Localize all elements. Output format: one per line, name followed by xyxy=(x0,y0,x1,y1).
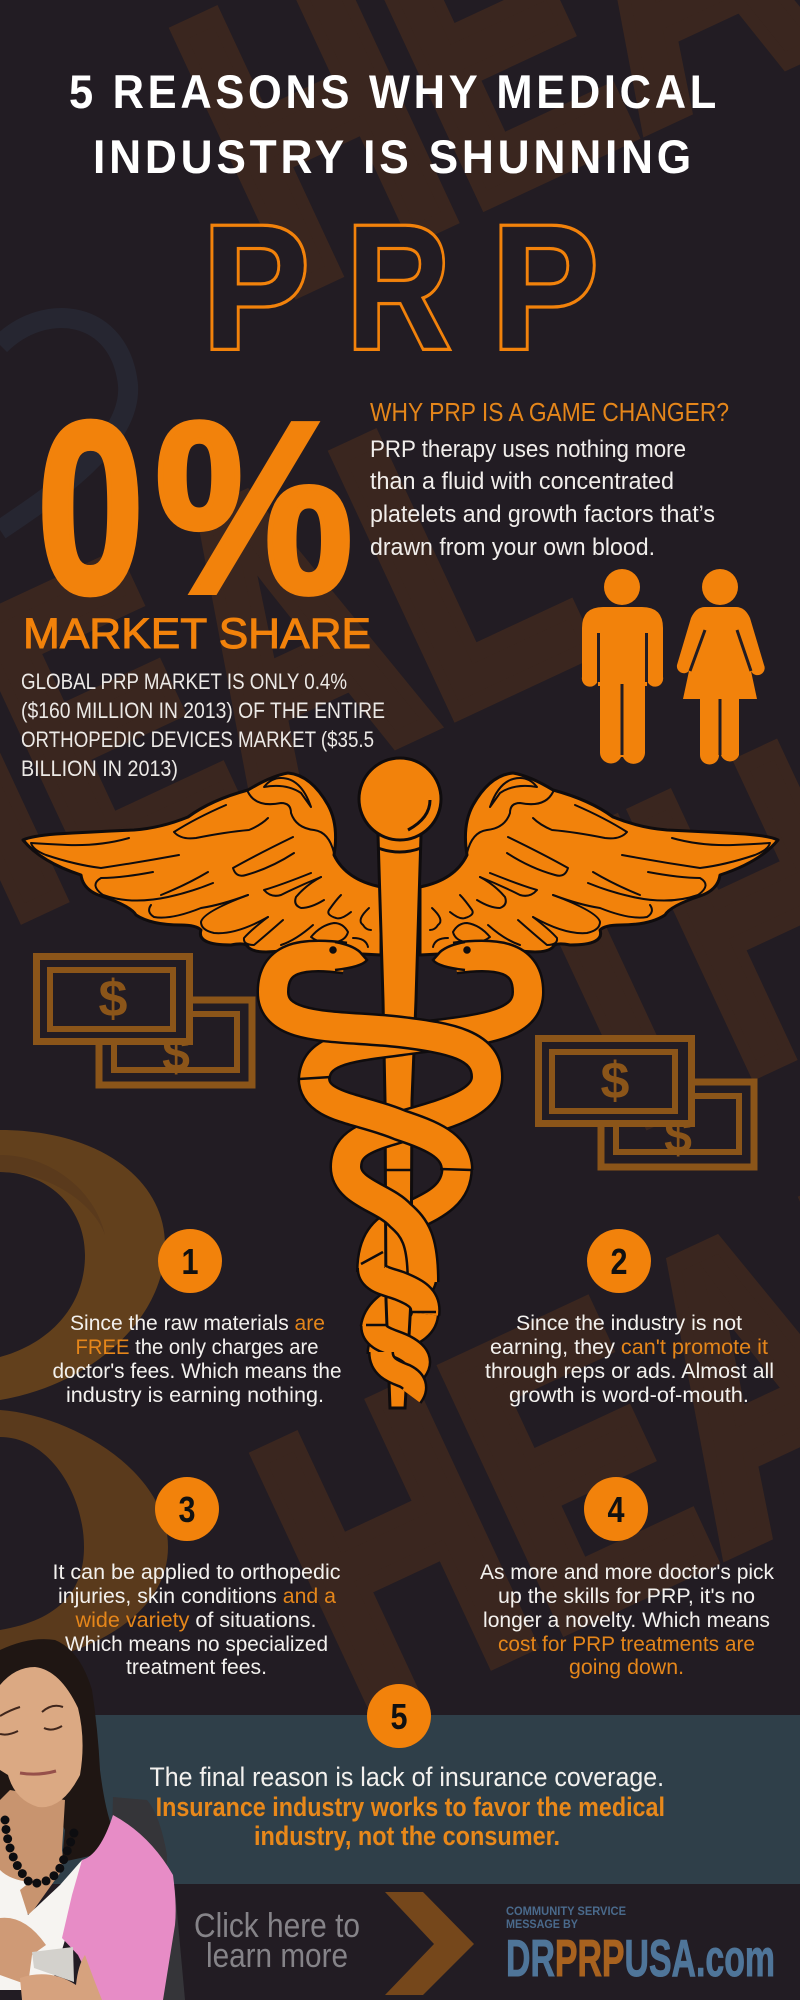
number badge 5: 5 xyxy=(390,1696,408,1737)
title: INDUSTRY IS SHUNNING xyxy=(93,130,695,183)
reason 2 text: growth is word-of-mouth. xyxy=(509,1384,749,1407)
reason 4 text: As more and more doctor's pick xyxy=(480,1561,774,1584)
reason 4 text: up the skills for PRP, it's no xyxy=(498,1585,755,1608)
big stat: 0%: 0 xyxy=(37,371,144,644)
snake: lower bands xyxy=(299,1077,472,1396)
reason 5 text xyxy=(150,1762,665,1851)
text block: why PRP is a game changer: drawn from your own blood. xyxy=(370,534,655,561)
text block: global PRP market: ORTHOPEDIC DEVICES MARKET ($35.5 xyxy=(21,727,374,752)
hand pointing xyxy=(0,1918,46,1985)
reason 1 text: industry is earning nothing. xyxy=(66,1384,324,1407)
number badge 3: 3 xyxy=(178,1489,196,1530)
text block: why PRP is a game changer: PRP therapy uses nothing more xyxy=(370,436,686,463)
number badge 3 xyxy=(155,1477,219,1541)
heading: PRP outlined letters: P xyxy=(492,190,598,386)
reason 2 text: Since the industry is not xyxy=(516,1312,742,1335)
text block: global PRP market: ($160 MILLION IN 2013) OF THE ENTIRE xyxy=(21,698,385,723)
number badge 5 xyxy=(367,1684,431,1748)
big stat: 0% xyxy=(37,371,353,644)
snake under segments xyxy=(372,1168,457,1354)
panel: reason 5 band xyxy=(0,1684,800,1884)
call to action text: learn more xyxy=(206,1937,348,1975)
heading: PRP outlined letters xyxy=(203,190,598,386)
number badge 4: 4 xyxy=(608,1489,624,1530)
reason 3 text: Which means no specialized xyxy=(65,1633,328,1656)
reason 3 text: injuries, skin conditions and a xyxy=(58,1585,336,1608)
credit text: COMMUNITY SERVICE xyxy=(506,1904,626,1918)
text block: why PRP is a game changer: platelets and growth factors that’s xyxy=(370,501,715,528)
heading: PRP outlined letters: R xyxy=(347,190,450,386)
big stat: 0%: % xyxy=(155,371,353,644)
reason 2 text: earning, they can't promote it xyxy=(490,1336,768,1359)
snake: right strand top xyxy=(314,956,528,1082)
reason 1 text: doctor's fees. Which means the xyxy=(52,1360,342,1383)
icon: money notes right: $ xyxy=(601,1052,630,1110)
number badge 1 xyxy=(158,1229,222,1293)
reason 2 text: through reps or ads. Almost all xyxy=(485,1360,774,1383)
call to action text xyxy=(194,1907,360,1975)
reason 5 text: The final reason is lack of insurance coverage. xyxy=(150,1762,664,1792)
heading: PRP outlined letters: P xyxy=(203,190,309,386)
phone xyxy=(32,1947,74,1982)
chair xyxy=(110,1797,185,2000)
left wing xyxy=(23,773,381,955)
reason 1 text: Since the raw materials are xyxy=(70,1312,325,1335)
right wing xyxy=(420,773,778,955)
number badge 1: 1 xyxy=(182,1241,198,1282)
reason 4 text: going down. xyxy=(569,1656,684,1679)
heading: PRP outlined letters: P xyxy=(492,190,598,386)
snake heads xyxy=(330,942,470,970)
background: brown numeral lobes xyxy=(0,1130,168,1662)
reason 4 text: cost for PRP treatments are xyxy=(498,1633,755,1656)
icon: money notes left: $ xyxy=(99,970,128,1028)
reason 3 xyxy=(52,1477,341,1679)
icon: money notes right xyxy=(538,1038,754,1167)
icon: money notes left xyxy=(36,956,252,1085)
cardigan xyxy=(62,1815,176,2000)
call to action text: Click here to xyxy=(194,1907,360,1945)
photo: woman with phone xyxy=(0,1639,185,2000)
reason 3 text: It can be applied to orthopedic xyxy=(52,1561,341,1584)
reason 2 xyxy=(485,1229,774,1407)
icon: money notes right: $ xyxy=(664,1108,692,1164)
arrow: chevron xyxy=(385,1892,474,1995)
background: dark numeral arc xyxy=(0,318,128,530)
number badge 4 xyxy=(584,1477,648,1541)
heading: PRP outlined letters: P xyxy=(203,190,309,386)
reason 4 text: longer a novelty. Which means xyxy=(483,1609,770,1632)
number badge 2: 2 xyxy=(610,1241,628,1282)
credit text: MESSAGE BY xyxy=(506,1917,578,1931)
reason 5 text: industry, not the consumer. xyxy=(254,1821,560,1851)
text block: global PRP market: BILLION IN 2013) xyxy=(21,756,178,781)
facial features xyxy=(0,1706,63,1774)
staff xyxy=(378,835,421,1408)
snake: left strand and band xyxy=(273,956,487,1282)
reason 4 text xyxy=(480,1561,774,1679)
credit text xyxy=(506,1904,775,1988)
number badge 2 xyxy=(587,1229,651,1293)
heading: PRP outlined letters: R xyxy=(347,190,450,386)
text block: global PRP market: GLOBAL PRP MARKET IS ONLY 0.4% xyxy=(21,669,347,694)
reason 1 xyxy=(52,1229,342,1407)
ball xyxy=(359,758,441,852)
illustration: caduceus xyxy=(23,758,778,1408)
text block: why PRP is a game changer: WHY PRP IS A GAME CHANGER? xyxy=(370,397,729,427)
icon: man xyxy=(582,569,663,764)
blouse xyxy=(0,1860,82,1990)
label: market share: MARKET SHARE xyxy=(23,610,371,658)
text block: global PRP market xyxy=(21,669,385,781)
title: 5 REASONS WHY MEDICAL xyxy=(69,65,720,118)
icon: money notes left: $ xyxy=(162,1026,190,1082)
text block: why PRP is a game changer xyxy=(370,397,729,561)
reason 5 text: Insurance industry works to favor the medical xyxy=(156,1792,665,1822)
reason 4 xyxy=(480,1477,774,1679)
text block: why PRP is a game changer: than a fluid with concentrated xyxy=(370,468,674,495)
reason 3 text: treatment fees. xyxy=(126,1656,267,1679)
reason 3 text: wide variety of situations. xyxy=(74,1609,316,1632)
hair xyxy=(0,1639,113,1862)
neck and chest xyxy=(0,1790,65,1915)
necklace xyxy=(5,1820,75,1883)
reason 1 text: FREE the only charges are xyxy=(76,1336,318,1359)
icon: woman xyxy=(677,569,765,764)
title xyxy=(69,65,720,183)
reason 3 text xyxy=(52,1561,341,1679)
snake: crossing band A xyxy=(314,1078,457,1170)
face xyxy=(0,1667,83,1807)
reason 1 text xyxy=(52,1312,342,1407)
reason 2 text xyxy=(485,1312,774,1407)
hand holding xyxy=(20,1955,102,2000)
